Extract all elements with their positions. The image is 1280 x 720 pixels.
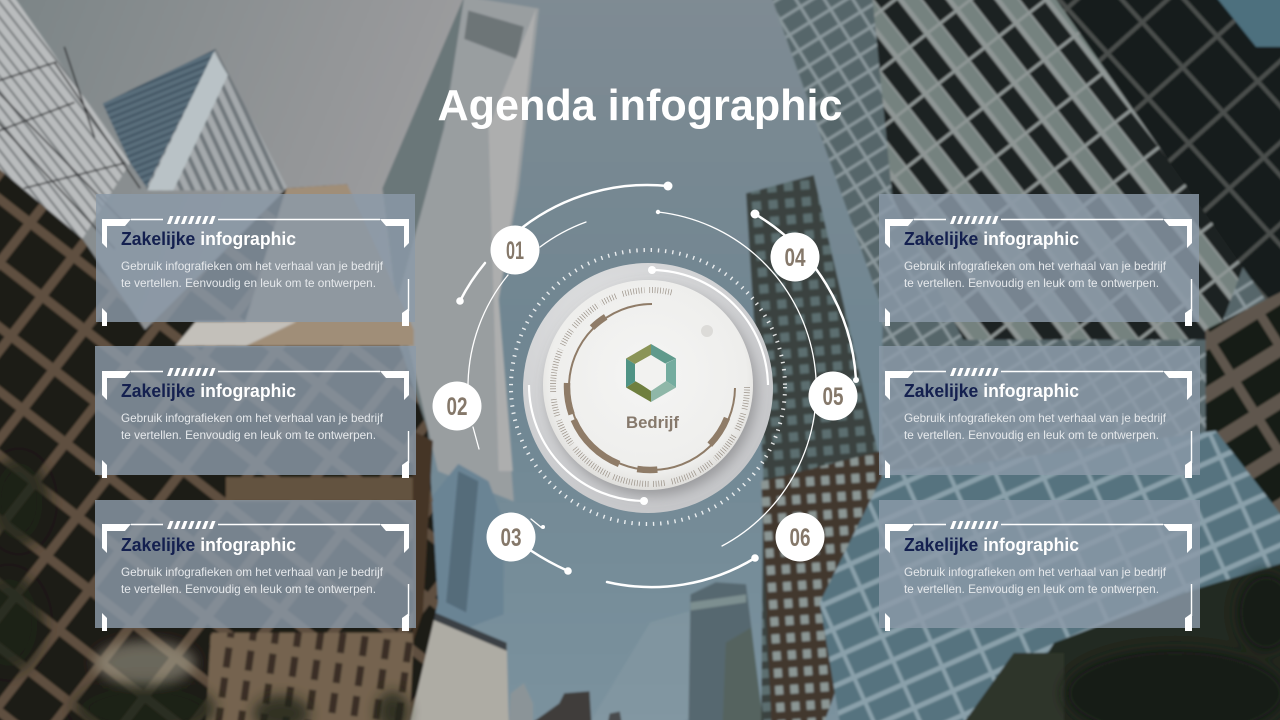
panel title: Zakelijke infographic bbox=[121, 535, 296, 555]
panel text: Gebruik infografieken om het verhaal van je bedrijf bbox=[121, 411, 384, 425]
white inner arc bottom left bbox=[529, 385, 648, 505]
arc end dots bbox=[456, 182, 859, 575]
tick ring bbox=[511, 250, 785, 524]
panel text: Gebruik infografieken om het verhaal van je bedrijf bbox=[904, 259, 1167, 273]
panel title: Zakelijke infographic bbox=[904, 229, 1079, 249]
panel frame bbox=[885, 521, 1192, 631]
arc: 06 bbox=[607, 558, 755, 587]
arc: 04 to 05 bbox=[755, 214, 856, 380]
badge 05 bbox=[808, 372, 858, 420]
panel text: te vertellen. Eenvoudig en leuk om te ontwerpen. bbox=[904, 582, 1159, 596]
badge 01 bbox=[490, 226, 540, 274]
arc: 01 top bbox=[523, 185, 668, 227]
thin arc: 02 tail bbox=[473, 427, 479, 449]
badge 01: 01 bbox=[506, 237, 524, 265]
orbit arcs bbox=[460, 185, 856, 587]
arc: 03 bbox=[530, 550, 568, 571]
panel frame bbox=[102, 368, 409, 478]
arc: 01 lower bbox=[460, 263, 485, 301]
badge 02: 02 bbox=[446, 393, 468, 421]
badge 04 bbox=[770, 232, 820, 282]
icon: company logo bbox=[626, 344, 676, 402]
title: Agenda infographic bbox=[438, 81, 842, 130]
badge 03 bbox=[486, 512, 536, 562]
badge 03: 03 bbox=[500, 524, 522, 552]
panel title: Zakelijke infographic bbox=[121, 381, 296, 401]
brown thin arc bbox=[569, 304, 735, 470]
panel text bbox=[904, 411, 1167, 442]
panel frame bbox=[885, 368, 1192, 478]
thin arc: 03 tail bbox=[531, 519, 542, 528]
panel frame bbox=[885, 216, 1192, 326]
panel: right 1 bbox=[879, 194, 1199, 326]
panel text: Gebruik infografieken om het verhaal van je bedrijf bbox=[121, 565, 384, 579]
thin arc: 01 to 02 bbox=[468, 275, 508, 385]
central dial bbox=[511, 250, 785, 524]
panel text: te vertellen. Eenvoudig en leuk om te ontwerpen. bbox=[121, 428, 376, 442]
panel: left 1 bbox=[96, 194, 415, 326]
panel title: Zakelijke infographic bbox=[904, 381, 1079, 401]
white inner arc top right bbox=[648, 266, 768, 385]
panel title: Zakelijke infographic bbox=[904, 535, 1079, 555]
thin arc: 01 inner bbox=[540, 222, 586, 247]
panel text bbox=[904, 565, 1167, 596]
company name: Bedrijf bbox=[626, 413, 679, 432]
badge 06 bbox=[776, 512, 824, 562]
small bump bbox=[701, 325, 713, 337]
brown thick segments bbox=[567, 304, 733, 470]
panel frame bbox=[102, 216, 409, 326]
badge 05: 05 bbox=[822, 383, 844, 411]
panel text bbox=[121, 411, 384, 442]
badge 02 bbox=[432, 382, 482, 430]
outer disc bbox=[523, 263, 773, 513]
panel: left 3 bbox=[95, 500, 416, 631]
fine tick marks bbox=[553, 290, 747, 484]
panel text bbox=[121, 259, 384, 290]
badge 04: 04 bbox=[784, 244, 806, 272]
panel: left 2 bbox=[95, 346, 416, 478]
panel text bbox=[121, 565, 384, 596]
thin arc: 04 to 06 bbox=[658, 212, 816, 546]
panel text: te vertellen. Eenvoudig en leuk om te ontwerpen. bbox=[904, 276, 1159, 290]
panel: right 3 bbox=[879, 500, 1200, 631]
panel: right 2 bbox=[879, 346, 1200, 478]
panel text: te vertellen. Eenvoudig en leuk om te ontwerpen. bbox=[121, 582, 376, 596]
panel text: Gebruik infografieken om het verhaal van je bedrijf bbox=[121, 259, 384, 273]
panel text bbox=[904, 259, 1167, 290]
panel text: te vertellen. Eenvoudig en leuk om te ontwerpen. bbox=[121, 276, 376, 290]
panel text: te vertellen. Eenvoudig en leuk om te ontwerpen. bbox=[904, 428, 1159, 442]
panel text: Gebruik infografieken om het verhaal van je bedrijf bbox=[904, 565, 1167, 579]
panel text: Gebruik infografieken om het verhaal van je bedrijf bbox=[904, 411, 1167, 425]
badge 06: 06 bbox=[790, 524, 810, 552]
panel title: Zakelijke infographic bbox=[121, 229, 296, 249]
inner disc bbox=[543, 280, 753, 490]
panel frame bbox=[102, 521, 409, 631]
